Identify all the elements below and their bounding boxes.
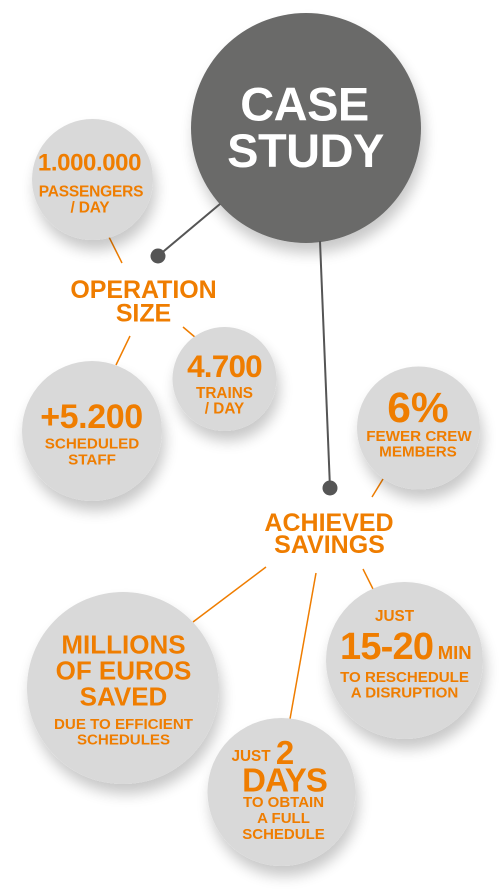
savings figure: OF EUROS — [56, 656, 191, 686]
heading: achieved savings: SAVINGS — [274, 531, 385, 559]
panel: millions saved — [27, 592, 219, 784]
days figure: 2 — [276, 734, 294, 771]
reschedule prefix: JUST — [375, 608, 415, 625]
heading: operation size: SIZE — [116, 300, 171, 328]
staff label: SCHEDULED — [45, 436, 139, 452]
title: STUDY — [227, 124, 384, 177]
reschedule label: TO RESCHEDULE — [340, 669, 469, 686]
crew figure: 6% — [387, 385, 449, 432]
title: CASE — [240, 78, 369, 130]
days prefix: JUST — [231, 748, 271, 765]
connector: case study to operation size — [150, 204, 220, 264]
staff label: STAFF — [68, 452, 116, 468]
panel: reschedule time — [326, 582, 483, 739]
trains label: TRAINS — [196, 385, 253, 402]
crew label: FEWER CREW — [366, 428, 472, 445]
orange connector lines — [109, 237, 383, 719]
connector: case study to achieved savings — [320, 241, 338, 496]
panel: days to full schedule — [208, 718, 356, 866]
heading: operation size: OPERATION — [70, 276, 217, 304]
reschedule label: A DISRUPTION — [351, 685, 458, 702]
panel: fewer crew members — [357, 366, 480, 490]
trains figure: 4.700 — [187, 348, 262, 384]
passengers label: / DAY — [71, 200, 110, 216]
days label: A FULL — [257, 810, 310, 827]
days label: SCHEDULE — [242, 826, 325, 843]
panel: trains per day — [172, 327, 276, 431]
passengers figure: 1.000.000 — [38, 150, 141, 176]
savings figure: MILLIONS — [61, 630, 186, 660]
days figure: DAYS — [242, 762, 327, 799]
panel: passengers per day — [32, 119, 153, 240]
reschedule figure: 15-20MIN — [340, 626, 472, 668]
days label: TO OBTAIN — [243, 794, 324, 811]
crew label: MEMBERS — [379, 444, 457, 460]
trains label: / DAY — [205, 400, 244, 418]
passengers label: PASSENGERS — [39, 184, 143, 200]
savings label: DUE TO EFFICIENT — [54, 716, 194, 733]
panel: case study circle — [191, 13, 421, 243]
savings figure: SAVED — [80, 682, 167, 712]
staff figure: +5.200 — [40, 398, 143, 436]
panel: scheduled staff — [22, 361, 162, 501]
savings label: SCHEDULES — [77, 732, 170, 749]
heading: achieved savings: ACHIEVED — [264, 509, 394, 537]
